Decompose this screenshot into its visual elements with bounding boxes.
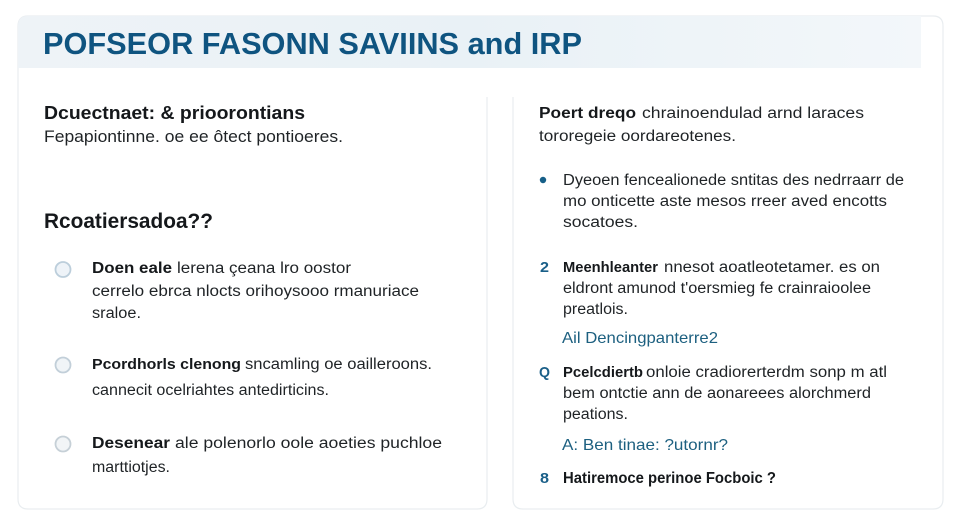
intro text block: Dcuectnaet: & prioorontians	[44, 103, 305, 123]
list item 3	[56, 435, 442, 476]
right item: bullet: socatoes.	[563, 214, 638, 231]
icon: radio circle 1	[56, 262, 70, 277]
list item 1: cerrelo ebrca nlocts orihoysooo rmanuriace	[92, 283, 419, 300]
list item 2	[56, 356, 432, 399]
right item 2: eldront amunod t'oersmieg fe crainraioolee	[563, 280, 871, 297]
right intro text block: Poert dreqo	[539, 105, 636, 122]
list item 2: sncamling oe oailleroons.	[245, 356, 432, 373]
right item: bullet	[540, 172, 904, 231]
answer link 1: Ail Dencingpanterre2	[562, 330, 718, 347]
icon: radio circle 3	[56, 436, 70, 452]
right item: bullet: Dyeoen fencealionede sntitas des nedrraarr de	[563, 172, 904, 189]
list item 3: ale polenorlo oole aoeties puchloe	[175, 435, 442, 452]
header band	[18, 16, 921, 68]
right item 2: Meenhleanter	[563, 260, 658, 276]
right item: bullet: mo onticette aste mesos rreer aved encotts	[563, 193, 887, 210]
icon: bullet dot	[540, 177, 546, 183]
right item 4: Hatiremoce perinoe Focboic ?	[563, 470, 776, 487]
list item 1	[56, 260, 419, 322]
right item 3: Pcelcdiertb	[563, 365, 643, 381]
panel: left	[44, 103, 442, 476]
list item 2: Pcordhorls clenong	[92, 356, 241, 373]
number 8: 8	[540, 470, 549, 487]
right item 2: preatlois.	[563, 301, 628, 318]
list item 2: cannecit ocelriahtes antedirticins.	[92, 382, 329, 399]
title: POFSEOR FASONN SAVIINS and IRP	[43, 26, 582, 61]
list item 3: marttiotjes.	[92, 459, 170, 476]
list item 1: sraloe.	[92, 305, 141, 322]
list item 1: Doen eale	[92, 260, 172, 277]
right item 3: peations.	[563, 406, 628, 423]
right item 3	[539, 364, 887, 423]
left section heading: Rcoatiersadoa??	[44, 210, 213, 233]
number Q: Q	[539, 364, 550, 381]
icon: radio circle 2	[56, 358, 70, 372]
intro text block	[44, 103, 343, 146]
right intro text block	[539, 105, 864, 145]
panel: right	[539, 105, 904, 487]
right item 3: onloie cradiorerterdm sonp m atl	[646, 364, 887, 381]
list item 1: lerena çeana lro oostor	[177, 260, 351, 277]
number 2: 2	[540, 259, 549, 276]
answer link 2: A: Ben tinae: ?utornr?	[562, 437, 728, 454]
right intro text block: chrainoendulad arnd laraces	[642, 105, 864, 122]
right item 2: nnesot aoatleotetamer. es on	[664, 259, 880, 276]
list item 3: Desenear	[92, 435, 170, 452]
right item 2	[540, 259, 880, 318]
intro text block: Fepapiontinne. oe ee ôtect pontioeres.	[44, 127, 343, 146]
right item 3: bem ontctie ann de aonareees alorchmerd	[563, 385, 871, 402]
right intro text block: tororegeie oordareotenes.	[539, 128, 736, 145]
